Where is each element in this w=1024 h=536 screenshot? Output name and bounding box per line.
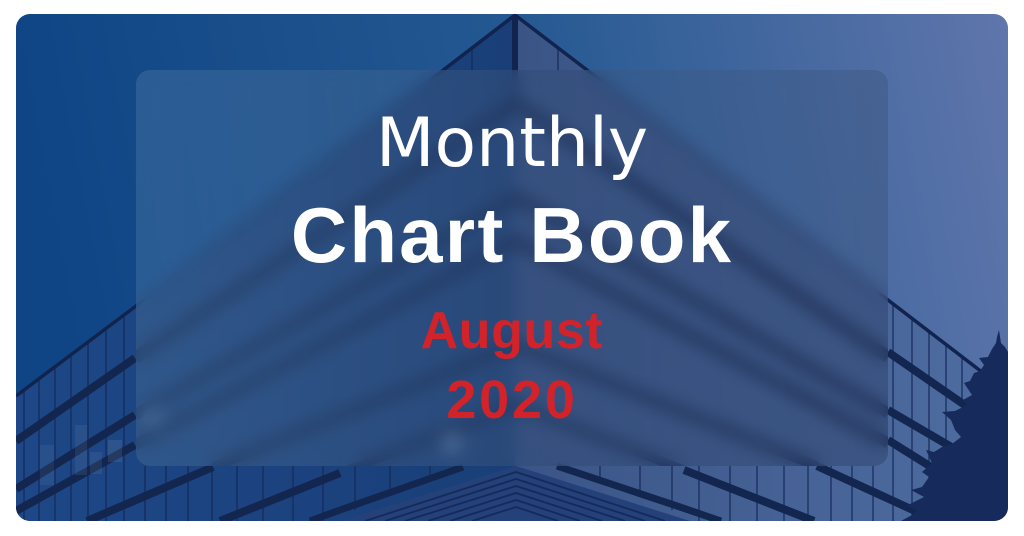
central corner column <box>512 17 518 81</box>
reflected window lights <box>40 407 463 485</box>
spruce tree silhouette <box>901 330 1008 521</box>
year: 2020: 2020 <box>446 370 578 430</box>
wall shading behind glass panel <box>516 70 888 466</box>
panel: frosted glass card <box>136 70 888 466</box>
floor bands behind glass panel <box>135 103 888 473</box>
title: Chart Book: Chart Book <box>291 191 733 279</box>
month: August: August <box>421 302 603 360</box>
building left wall <box>16 15 516 521</box>
title: Monthly: Monthly <box>376 104 648 183</box>
building right wall <box>515 15 1008 521</box>
lower roof louvers <box>340 466 690 521</box>
